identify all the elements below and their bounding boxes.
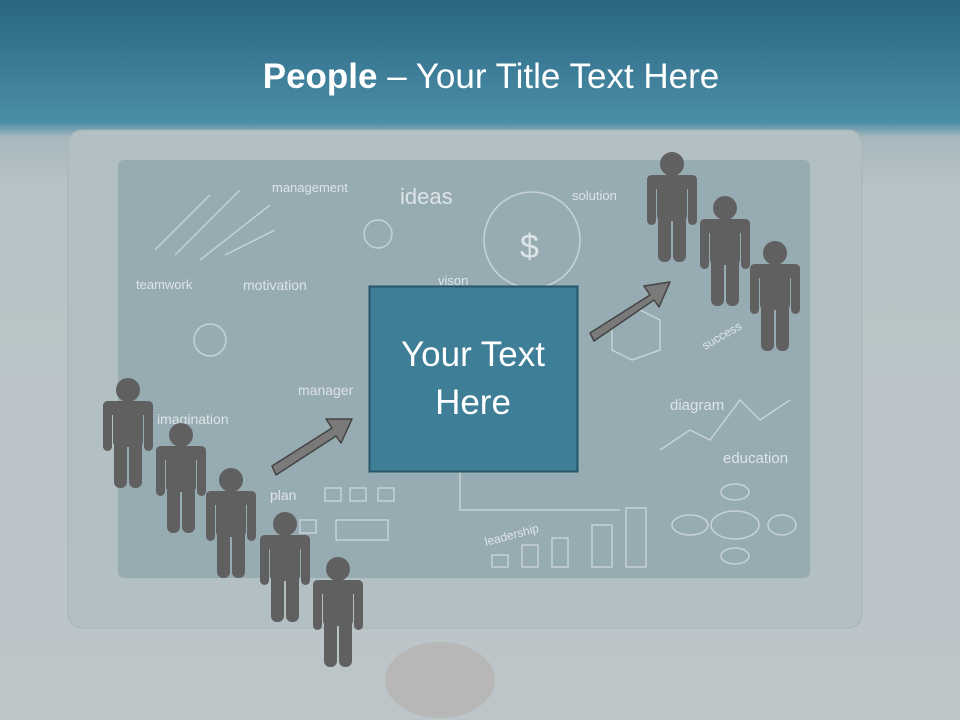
tablet — [68, 130, 862, 718]
people: right group — [647, 152, 800, 351]
sketch words: manager — [298, 382, 354, 398]
sketch words: education — [723, 450, 788, 467]
sketch words: teamwork — [136, 277, 193, 292]
sketch words: $ — [520, 228, 539, 266]
right arrow — [590, 282, 670, 341]
title: People – Your Title Text Here — [263, 57, 719, 96]
sketch words: success — [700, 319, 744, 353]
left arrow — [272, 419, 352, 475]
sketch words: vison — [438, 273, 468, 288]
sketch words: solution — [572, 188, 617, 203]
sketch words: ideas — [400, 184, 453, 209]
center text box — [370, 286, 578, 472]
sketch words: diagram — [670, 397, 724, 414]
sketch words: imagination — [157, 411, 229, 427]
sketch words — [136, 180, 788, 549]
center text box: Here — [435, 383, 511, 422]
sketch words: leadership — [483, 521, 541, 549]
center text box: Your Text — [401, 335, 545, 374]
sketch words: plan — [270, 487, 296, 503]
people: left group — [103, 378, 363, 667]
sketch words: management — [272, 180, 348, 195]
sketch words: motivation — [243, 277, 307, 293]
